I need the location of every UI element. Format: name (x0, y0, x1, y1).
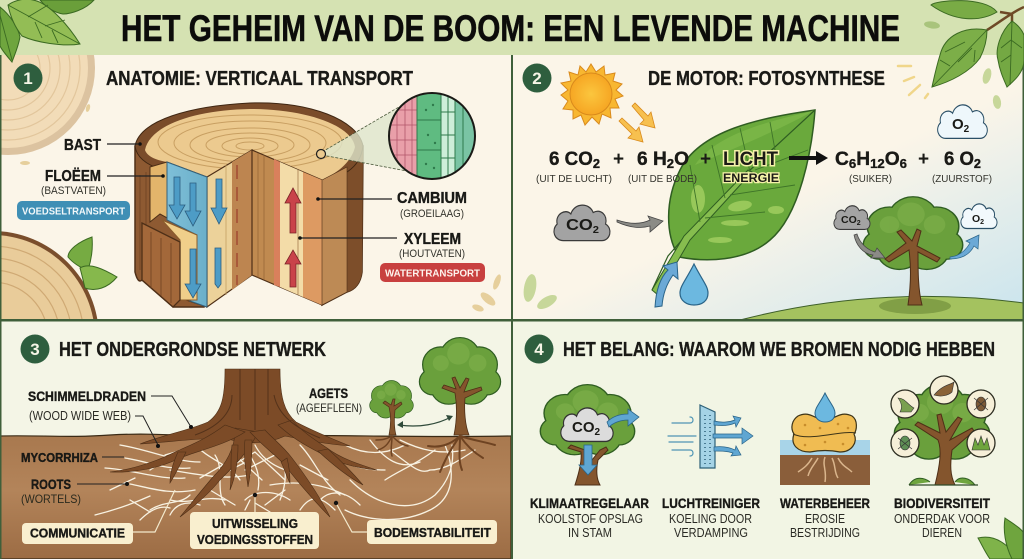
term: 6 CO2 (536, 149, 612, 185)
panel 1: anatomie (2, 55, 501, 319)
badge 1 (14, 64, 42, 92)
text: klimaatregelaar: KOOLSTOF OPSLAG (538, 511, 643, 526)
pill: watertransport: WATERTRANSPORT (385, 268, 481, 280)
text: klimaatregelaar (530, 495, 649, 540)
badge 2: 2 (532, 69, 542, 88)
plus: + (613, 149, 624, 170)
term: 6 O2: (ZUURSTOF) (932, 173, 992, 185)
sun ray arrows (619, 103, 655, 142)
term: suiker: O (885, 149, 900, 170)
small O2 cloud (961, 204, 997, 228)
callout: uitwisseling: VOEDINGSSTOFFEN (197, 532, 313, 547)
term: 6 O2 (932, 149, 992, 185)
heading 3: HET ONDERGRONDSE NETWERK (59, 339, 326, 361)
text: waterbeheer: EROSIE (805, 511, 845, 526)
O2 cloud: 2 (964, 124, 970, 135)
term: 6 O2: 2 (974, 156, 981, 171)
hill (740, 296, 1024, 320)
blue arrows: food down (169, 177, 227, 298)
term: 6 H2O: (UIT DE BODE) (628, 173, 697, 185)
heading 1: ANATOMIE: VERTICAAL TRANSPORT (106, 68, 413, 90)
badge 4: 4 (534, 340, 544, 359)
sun glints (898, 66, 928, 98)
term: suiker: 6 (900, 156, 907, 171)
term: 6 H2O (628, 149, 697, 185)
label: schimmeldraden: SCHIMMELDRADEN (28, 388, 146, 404)
text: waterbeheer: BESTRIJDING (790, 525, 860, 540)
text: biodiversiteit: BIODIVERSITEIT (894, 495, 990, 511)
label: roots: ROOTS (31, 477, 71, 492)
arrow into tree (854, 234, 885, 258)
trunk bark lines (195, 369, 320, 438)
CO2 cloud: CO (566, 217, 590, 234)
small O2 cloud: 2 (980, 219, 984, 226)
label: xyleem (298, 231, 465, 260)
CO2 cloud (554, 205, 610, 241)
label: xyleem: XYLEEM (404, 231, 461, 248)
small O2 cloud: O (972, 213, 980, 225)
label: wood wide web (29, 409, 160, 448)
water arrow (655, 262, 678, 307)
term: suiker: 6 (849, 156, 856, 171)
label: agets: (AGEEFLEEN) (296, 401, 362, 415)
plus: + (918, 149, 929, 170)
leaves beside slice (68, 237, 117, 290)
icon: klimaat tree: 2 (594, 427, 600, 438)
red arrows: water up (285, 188, 301, 287)
text: luchtreiniger (662, 495, 760, 540)
reaction arrow (789, 151, 828, 165)
label: schimmeldraden (28, 388, 193, 429)
text: biodiversiteit: DIEREN (922, 525, 962, 540)
trunk cross-section (135, 103, 363, 307)
text: biodiversiteit (894, 495, 990, 540)
tree (864, 197, 962, 305)
fungal threads (95, 440, 475, 520)
term: 6 CO2: 2 (593, 156, 600, 171)
callout: communicatie: COMMUNICATIE (30, 526, 125, 540)
phloem blue strip (150, 162, 207, 307)
term: 6 H2O: O (674, 149, 689, 170)
icon: luchtreiniger filter (668, 405, 753, 468)
large tree (420, 338, 500, 472)
icon: waterbeheer sponge (780, 393, 870, 485)
icon: klimaat tree (541, 385, 639, 485)
badge 4 (524, 334, 554, 364)
left cut wall (207, 150, 252, 307)
formula (536, 149, 992, 185)
label: cambium: CAMBIUM (397, 190, 467, 207)
callout: uitwisseling (190, 493, 319, 549)
O2 cloud: O (952, 116, 964, 133)
term: suiker: 12 (870, 156, 885, 171)
small tree (370, 381, 413, 456)
panel 4: belang (512, 320, 1024, 559)
small CO2 cloud: CO (841, 214, 857, 226)
callout: uitwisseling: UITWISSELING (212, 516, 298, 531)
term: licht energie (723, 149, 779, 185)
badge 1: 1 (23, 69, 33, 88)
text: klimaatregelaar: KLIMAATREGELAAR (530, 495, 649, 511)
label: agets: AGETS (309, 385, 348, 401)
small leaves (522, 67, 1002, 312)
term: 6 O2: 6 O (944, 149, 975, 170)
water drop (680, 264, 708, 305)
pill: voedseltransport (17, 201, 130, 220)
label: cambium: (GROEILAAG) (400, 208, 464, 220)
badge 3 (20, 334, 50, 364)
label: roots: (WORTELS) (21, 492, 81, 506)
term: suiker: H (856, 149, 870, 170)
label: floeem: (BASTVATEN) (41, 185, 106, 197)
peeled bark piece (142, 223, 180, 307)
leaves bottom right (978, 518, 1024, 559)
panel 2: fotosynthese (512, 55, 1024, 320)
CO2 cloud: 2 (593, 225, 599, 236)
label: cambium (316, 190, 467, 220)
term: 6 CO2: 6 CO (549, 149, 593, 170)
arrow out of tree (950, 235, 979, 259)
label: bast (64, 137, 142, 154)
soil (0, 434, 511, 559)
term: suiker: C (835, 149, 849, 170)
term: 6 CO2: (UIT DE LUCHT) (536, 173, 612, 185)
term: licht energie: LICHT (723, 149, 778, 170)
wood slice top left (0, 0, 95, 155)
term: suiker (835, 149, 907, 185)
text: luchtreiniger: KOELING DOOR (669, 511, 752, 526)
leaf (652, 110, 815, 295)
label: xyleem: (HOUTVATEN) (399, 248, 465, 260)
badge 2 (522, 64, 552, 92)
callout: bodemstabiliteit (334, 501, 497, 544)
term: licht energie: ENERGIE (723, 171, 779, 185)
text: luchtreiniger: LUCHTREINIGER (662, 495, 760, 511)
magnifier (316, 93, 475, 179)
O2 cloud (938, 105, 987, 138)
trunk and roots (110, 369, 377, 517)
term: 6 H2O: 2 (667, 156, 674, 171)
text: waterbeheer (780, 495, 870, 540)
plus: + (700, 149, 711, 170)
double arrow between trees (397, 415, 453, 428)
icon: klimaat tree: CO (572, 419, 594, 436)
wood slice bottom left (0, 231, 99, 445)
label: roots (21, 477, 129, 506)
callout: bodemstabiliteit: BODEMSTABILITEIT (374, 525, 491, 540)
right cut wall (252, 150, 322, 305)
text: waterbeheer: WATERBEHEER (780, 495, 870, 511)
icon: biodiversiteit tree (891, 376, 995, 485)
term: suiker: (SUIKER) (849, 173, 892, 185)
leaves top left (0, 0, 94, 62)
label: agets (296, 385, 362, 415)
small CO2 cloud: 2 (857, 220, 861, 227)
callout: communicatie (22, 490, 175, 544)
pill: watertransport (380, 263, 485, 282)
small CO2 cloud (834, 206, 870, 229)
pill: voedseltransport: VOEDSELTRANSPORT (22, 206, 126, 218)
leaves and branch top right (924, 1, 1024, 87)
text: biodiversiteit: ONDERDAK VOOR (894, 511, 990, 526)
label: floeem (41, 167, 165, 197)
heading 2: DE MOTOR: FOTOSYNTHESE (648, 68, 885, 90)
small falling leaves (20, 104, 503, 313)
panel 3: netwerk (0, 320, 511, 559)
label: floeem: FLOËEM (45, 167, 101, 185)
header band (0, 0, 1024, 55)
label: mycorrhiza: MYCORRHIZA (21, 450, 99, 465)
text: klimaatregelaar: IN STAM (568, 525, 612, 540)
CO2 arrow to leaf (617, 216, 663, 232)
label: wood wide web: (WOOD WIDE WEB) (29, 409, 131, 423)
sun (561, 64, 623, 125)
text: luchtreiniger: VERDAMPING (674, 525, 748, 540)
term: 6 H2O: 6 H (637, 149, 667, 170)
label: bast: BAST (64, 137, 101, 154)
badge 3: 3 (30, 340, 40, 359)
